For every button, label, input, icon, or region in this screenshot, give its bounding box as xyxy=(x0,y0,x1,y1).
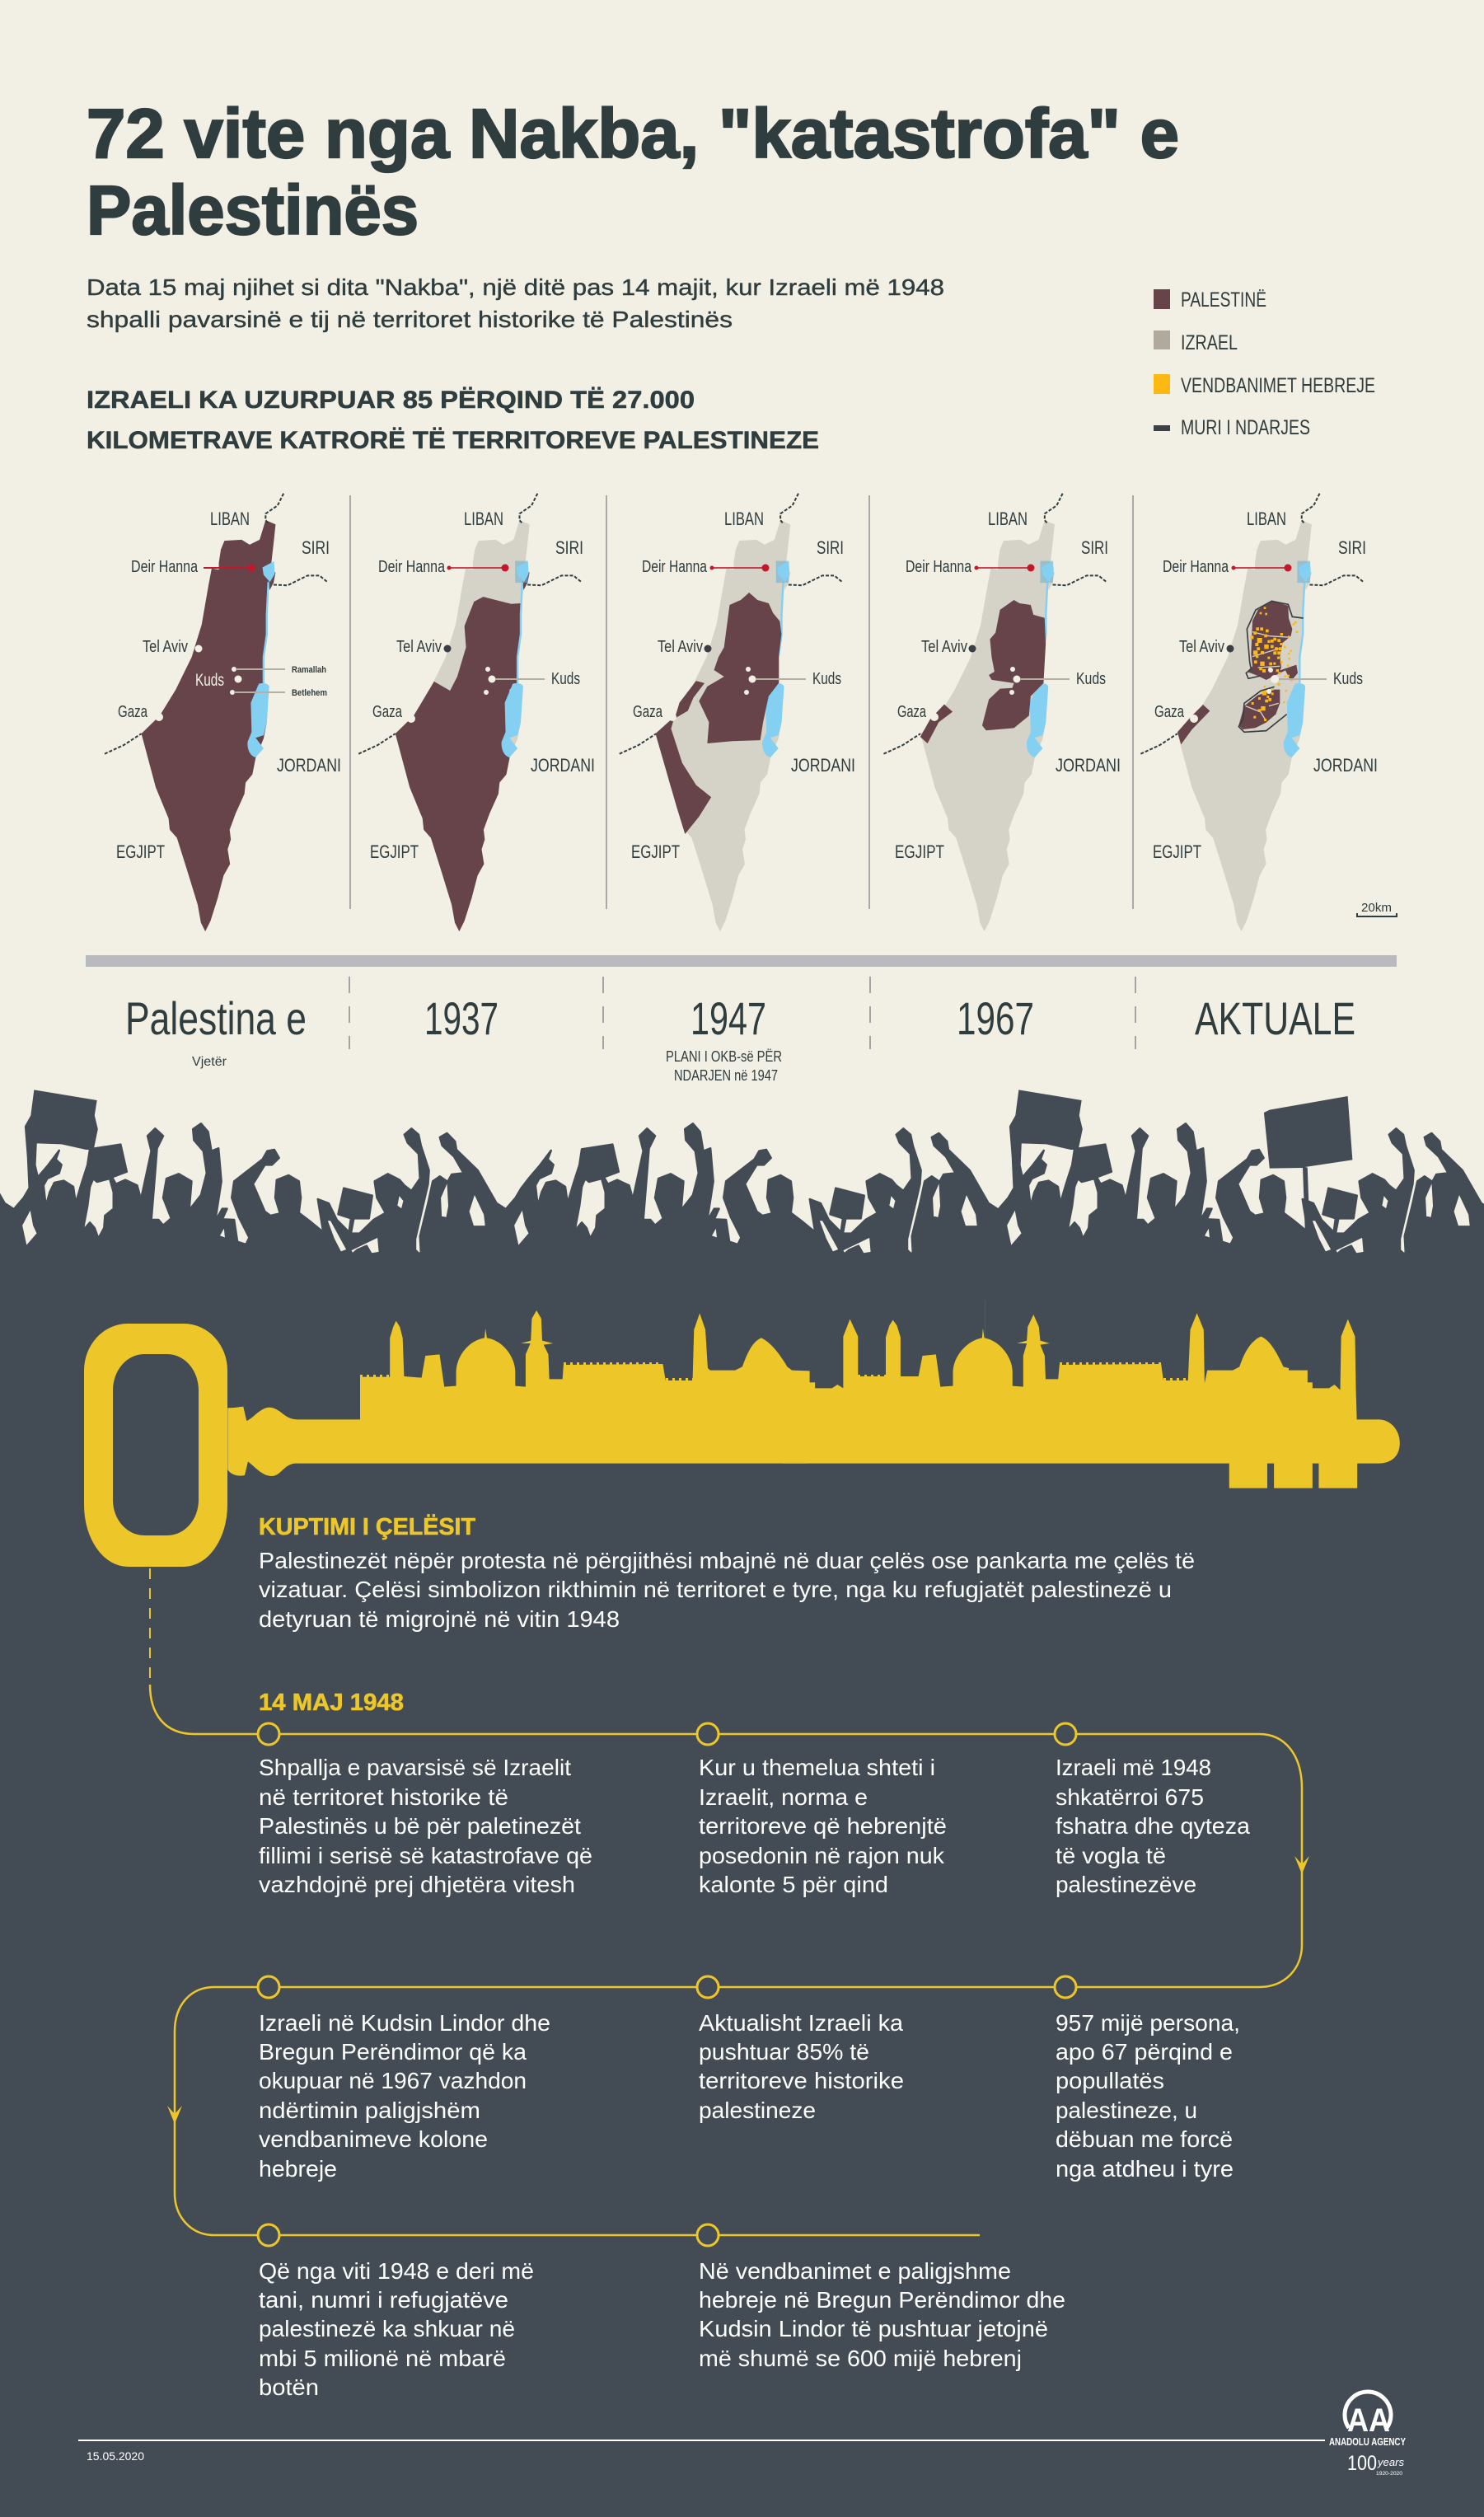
legend: VENDBANIMET HEBREJE xyxy=(1181,374,1375,397)
text: villages destroyed: shkatërroi 675 xyxy=(1056,1784,1204,1810)
map: ancient Palestine: JORDANI xyxy=(277,755,341,776)
subtitle: shpalli pavarsinë e tij në territoret historike të Palestinës xyxy=(87,307,733,332)
text: founding of the state: Kur u themelua shteti i xyxy=(699,1755,935,1780)
map: 1947 UN partition: JORDANI xyxy=(791,755,855,776)
Anadolu Agency logo: 1920-2020 xyxy=(1376,2472,1403,2477)
text: settlements: hebreje xyxy=(259,2156,337,2182)
Anadolu Agency logo xyxy=(1329,2392,1406,2477)
legend: PALESTINË xyxy=(1181,288,1266,312)
text: declaration: fillimi i serisë së katastrofave që xyxy=(259,1843,592,1868)
map: current: Kuds xyxy=(1333,670,1363,688)
text: refugees: botën xyxy=(259,2374,319,2400)
key with Jerusalem skyline xyxy=(84,1310,1400,1567)
text: declaration: në territoret historike të xyxy=(259,1784,508,1810)
map: ancient Palestine: Deir Hanna xyxy=(131,558,199,576)
text: settlers: Në vendbanimet e paligjshme xyxy=(699,2258,1011,2284)
map: ancient Palestine: LIBAN xyxy=(210,509,250,529)
heading: uzurpim: KILOMETRAVE KATRORË TË TERRITOREVE PALESTINEZE xyxy=(87,427,819,454)
timeline bar xyxy=(86,955,1397,967)
text: expelled people: palestineze, u xyxy=(1056,2098,1197,2123)
map: current: EGJIPT xyxy=(1153,841,1201,862)
map: ancient Palestine xyxy=(105,494,341,931)
text: occupation: palestineze xyxy=(699,2098,816,2123)
map: 1967: SIRI xyxy=(1081,537,1108,558)
map: 1967 xyxy=(883,494,1121,931)
map: ancient Palestine: Betlehem xyxy=(292,688,327,698)
heading: uzurpim xyxy=(87,387,819,454)
text: villages destroyed: të vogla të xyxy=(1056,1843,1166,1868)
timeline path with arrows xyxy=(150,1568,1309,2235)
map: 1967: Kuds xyxy=(1076,670,1106,688)
map: current: Tel Aviv xyxy=(1179,638,1224,656)
map: 1937: SIRI xyxy=(555,537,583,558)
text: settlers: Kudsin Lindor të pushtuar jetojnë xyxy=(699,2316,1048,2341)
Anadolu Agency logo: ANADOLU AGENCY xyxy=(1329,2435,1406,2448)
text: declaration: Palestinës u bë për paletinezët xyxy=(259,1813,581,1839)
text: occupation: territoreve historike xyxy=(699,2068,904,2093)
key meaning text: Palestinezët nëpër protesta në përgjithësi mbajnë në duar çelës ose pankarta me çelës të xyxy=(259,1548,1195,1573)
legend: MURI I NDARJES xyxy=(1181,416,1310,439)
heading: uzurpim: IZRAELI KA UZURPUAR 85 PËRQIND TË 27.000 xyxy=(87,387,695,414)
map: 1967: JORDANI xyxy=(1056,755,1121,776)
map: 1947 UN partition: Deir Hanna xyxy=(642,558,708,576)
map: ancient Palestine: Kuds xyxy=(195,671,224,690)
map: current: LIBAN xyxy=(1247,509,1286,529)
text: settlements xyxy=(259,2010,550,2182)
period label: current: AKTUALE xyxy=(1195,992,1355,1044)
text: occupation xyxy=(699,2010,904,2123)
map: current: Deir Hanna xyxy=(1163,558,1229,576)
crowd silhouette xyxy=(0,1090,1484,2517)
map: 1937: LIBAN xyxy=(464,509,503,529)
key meaning text: vizatuar. Çelësi simbolizon rikthimin në territoret e tyre, nga ku refugjatët palestinezë u xyxy=(259,1577,1172,1602)
map: ancient Palestine: Tel Aviv xyxy=(143,638,188,656)
map: 1937: Tel Aviv xyxy=(396,638,442,656)
text: refugees: Që nga viti 1948 e deri më xyxy=(259,2258,534,2284)
map: 1967: LIBAN xyxy=(988,509,1028,529)
Anadolu Agency logo: 100 xyxy=(1347,2452,1377,2475)
text: villages destroyed: palestinezëve xyxy=(1056,1872,1196,1897)
title: Palestinës xyxy=(87,171,419,249)
map: 1967: Gaza xyxy=(897,703,927,721)
map: ancient Palestine: SIRI xyxy=(302,537,330,558)
text: settlers xyxy=(699,2258,1065,2371)
text: refugees: mbi 5 milionë në mbarë xyxy=(259,2346,506,2371)
map: 1937: Gaza xyxy=(372,703,403,721)
text: villages destroyed: fshatra dhe qyteza xyxy=(1056,1813,1250,1839)
text: settlements: Bregun Perëndimor që ka xyxy=(259,2039,527,2065)
title: 72 vite nga Nakba, "katastrofa" e xyxy=(87,95,1179,172)
map: 1967: EGJIPT xyxy=(895,841,944,862)
text: settlements: ndërtimin paligjshëm xyxy=(259,2098,480,2123)
map: current: SIRI xyxy=(1338,537,1366,558)
text: expelled people: dëbuan me forcë xyxy=(1056,2126,1233,2152)
map: 1947 UN partition: LIBAN xyxy=(724,509,764,529)
text: settlements: Izraeli në Kudsin Lindor dhe xyxy=(259,2010,550,2036)
map: ancient Palestine: EGJIPT xyxy=(116,841,165,862)
period label: 1947: PLANI I OKB-së PËR xyxy=(666,1048,782,1065)
text: settlements: okupuar në 1967 vazhdon xyxy=(259,2068,527,2093)
legend: IZRAEL xyxy=(1181,331,1238,354)
text: expelled people: 957 mijë persona, xyxy=(1056,2010,1240,2036)
scale bar: 20km xyxy=(1361,901,1392,915)
text: founding of the state: posedonin në rajon nuk xyxy=(699,1843,945,1868)
period label: 1947 xyxy=(666,992,782,1084)
text: refugees: palestinezë ka shkuar në xyxy=(259,2316,515,2341)
map: 1937 xyxy=(358,494,595,931)
map: 1947 UN partition xyxy=(620,494,855,931)
Anadolu Agency logo: years xyxy=(1377,2456,1404,2468)
map: 1937: Deir Hanna xyxy=(378,558,446,576)
map: current xyxy=(1140,494,1378,931)
map: 1967: Deir Hanna xyxy=(906,558,972,576)
key meaning text xyxy=(259,1548,1195,1632)
text: founding of the state: kalonte 5 për qind xyxy=(699,1872,888,1897)
period label: 1937: 1937 xyxy=(424,992,499,1044)
text: founding of the state xyxy=(699,1755,947,1897)
text: refugees: tani, numri i refugjatëve xyxy=(259,2287,508,2313)
text: villages destroyed: Izraeli më 1948 xyxy=(1056,1755,1211,1780)
timeline nodes xyxy=(258,1723,1076,2246)
text: expelled people: popullatës xyxy=(1056,2068,1164,2093)
text: occupation: Aktualisht Izraeli ka xyxy=(699,2010,903,2036)
text: settlers: hebreje në Bregun Perëndimor dhe xyxy=(699,2287,1065,2313)
date: 15.05.2020 xyxy=(87,2449,144,2463)
period label: old Palestine: Palestina e xyxy=(125,992,307,1044)
subtitle: Data 15 maj njihet si dita "Nakba", një ditë pas 14 majit, kur Izraeli më 1948 xyxy=(87,274,944,300)
period label: old Palestine: Vjetër xyxy=(192,1055,227,1069)
Anadolu Agency logo: AA xyxy=(1347,2402,1390,2439)
map: 1947 UN partition: Tel Aviv xyxy=(658,638,703,656)
map: ancient Palestine: Gaza xyxy=(118,703,148,721)
text: founding of the state: territoreve që hebrenjtë xyxy=(699,1813,947,1839)
period dashes xyxy=(349,977,1135,1049)
footer line xyxy=(78,2440,1325,2441)
text: expelled people: apo 67 përqind e xyxy=(1056,2039,1233,2065)
subtitle xyxy=(87,274,944,332)
text: occupation: pushtuar 85% të xyxy=(699,2039,869,2065)
text: settlers: më shumë se 600 mijë hebrenj xyxy=(699,2346,1022,2371)
period label: 1947: 1947 xyxy=(691,992,766,1044)
text: refugees xyxy=(259,2258,534,2400)
text: founding of the state: Izraelit, norma e xyxy=(699,1784,868,1810)
text: settlements: vendbanimeve kolone xyxy=(259,2126,488,2152)
legend xyxy=(1154,288,1375,439)
map: 1937: EGJIPT xyxy=(370,841,419,862)
text: declaration: Shpallja e pavarsisë së Izraelit xyxy=(259,1755,571,1780)
date heading: 14 MAJ 1948 xyxy=(259,1690,404,1716)
period label: 1967: 1967 xyxy=(957,992,1034,1044)
map: 1947 UN partition: EGJIPT xyxy=(631,841,680,862)
map: 1937: Kuds xyxy=(551,670,580,688)
map: 1947 UN partition: SIRI xyxy=(817,537,844,558)
text: villages destroyed xyxy=(1056,1755,1250,1897)
text: declaration xyxy=(259,1755,592,1897)
text: expelled people: nga atdheu i tyre xyxy=(1056,2156,1234,2182)
map dividers xyxy=(349,495,1134,909)
map: ancient Palestine: Ramallah xyxy=(292,665,326,675)
title xyxy=(87,95,1179,249)
key meaning text: detyruan të migrojnë në vitin 1948 xyxy=(259,1606,620,1632)
map: 1937: JORDANI xyxy=(531,755,595,776)
map: current: JORDANI xyxy=(1313,755,1378,776)
scale bar xyxy=(1357,901,1397,916)
map: 1967: Tel Aviv xyxy=(921,638,967,656)
text: declaration: vazhdojnë prej dhjetëra vitesh xyxy=(259,1872,575,1897)
map: 1947 UN partition: Kuds xyxy=(812,670,841,688)
map: current: Gaza xyxy=(1154,703,1185,721)
period label: old Palestine xyxy=(125,992,307,1069)
map: 1947 UN partition: Gaza xyxy=(633,703,663,721)
period label: 1947: NDARJEN në 1947 xyxy=(674,1067,778,1084)
text: expelled people xyxy=(1056,2010,1240,2182)
key meaning heading: KUPTIMI I ÇELËSIT xyxy=(259,1513,475,1540)
